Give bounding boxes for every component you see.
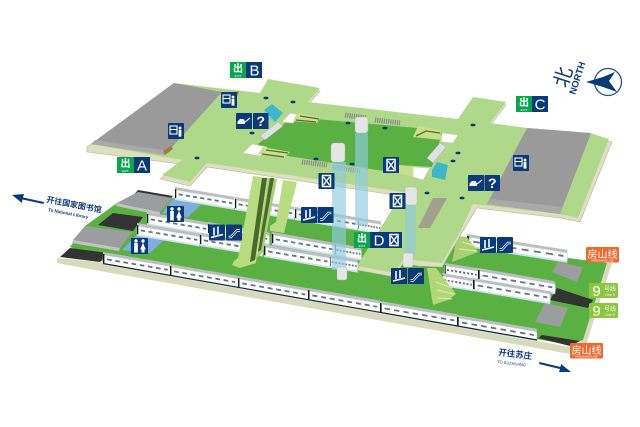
exit sign C: [516, 96, 548, 114]
icons: stairs and escalator south: [391, 268, 424, 284]
direction: to National Library: [12, 194, 102, 220]
icon: ticket office west B: [221, 92, 237, 108]
label: Line 9 south: [589, 303, 618, 320]
label: Line 9 south: 号线: [604, 305, 616, 313]
train: east lines: [442, 234, 567, 304]
icon: elevator three: [390, 193, 406, 209]
exit sign A: [117, 157, 150, 174]
icons: stairs and escalator east: [480, 237, 513, 253]
brown benches: [163, 91, 239, 155]
exit sign D with elevator: EXIT: [359, 244, 365, 248]
icons: service and information west: ?: [257, 113, 265, 129]
escalators to east platforms: [427, 236, 478, 305]
icons: service and information east: ?: [488, 175, 497, 191]
paid area: [258, 117, 442, 173]
small gate marks: [194, 97, 476, 199]
label: Fangshan line south: [570, 343, 603, 358]
passage bar: [418, 198, 447, 228]
direction: to National Library: To National Library: [48, 207, 89, 220]
exit sign B: EXIT: [235, 74, 241, 78]
icon: toilet north: [167, 206, 184, 222]
label: Line 9 north: 9: [592, 283, 601, 300]
direction: to Suzhuang: TO SUZHUANG: [497, 359, 526, 368]
concourse floor: [91, 79, 609, 273]
direction: to Suzhuang: 开往苏庄: [498, 347, 533, 361]
west ticket hall: [91, 83, 222, 155]
exit sign D with elevator: 出: [357, 232, 367, 245]
exit sign D with elevator: D: [374, 232, 385, 250]
exit sign A: 出: [120, 157, 130, 170]
label: Fangshan line north: FANGSHAN LINE: [591, 258, 614, 262]
exit sign C: 出: [519, 96, 529, 109]
label: Line 9 north: Line 9: [605, 293, 615, 297]
icon: toilet south: [131, 238, 148, 254]
east ticket hall: [487, 128, 591, 214]
train: front line: [103, 252, 537, 342]
track level green floor: [70, 192, 607, 345]
toilet areas: [122, 199, 201, 253]
label: Line 9 south: Line 9: [605, 313, 615, 317]
direction: to Suzhuang: [497, 347, 571, 372]
label: Fangshan line north: 房山线: [588, 248, 618, 261]
icon: elevator two: [318, 173, 334, 189]
exit sign D with elevator: [354, 232, 402, 250]
ticket machines: [260, 122, 446, 163]
elevator shafts: [332, 133, 416, 270]
platform blocks and tracks, west end: [60, 190, 173, 262]
exit sign B: [230, 62, 262, 80]
icon: ticket office east: [513, 155, 529, 171]
exit sign A: EXIT: [122, 169, 129, 173]
track level base: [57, 258, 612, 354]
label: Line 9 north: 号线: [604, 285, 616, 293]
icons: stairs and escalator centre: [301, 207, 334, 223]
elevator cars: [331, 117, 417, 280]
train: middle lines west: [137, 212, 361, 273]
exit sign A: A: [137, 158, 147, 174]
icon: elevator one: [383, 157, 399, 173]
ticket gates: [302, 115, 400, 171]
escalators to west platforms: [232, 176, 297, 268]
floor openings: [243, 113, 458, 180]
icon: ticket office west A: [168, 123, 184, 139]
label: Fangshan line south: 房山线: [572, 344, 602, 357]
north compass: 北: [549, 64, 578, 90]
concourse ledge: [87, 82, 612, 277]
label: Line 9 south: 9: [592, 303, 601, 320]
exit sign C: C: [535, 96, 546, 114]
exit sign B: 出: [233, 62, 243, 75]
direction: to National Library: 开往国家图书馆: [46, 194, 102, 215]
icons: service and information west: [236, 113, 268, 129]
exit sign B: B: [249, 62, 260, 80]
north compass: NORTH: [568, 60, 588, 96]
label: Fangshan line south: FANGSHAN LINE: [575, 354, 598, 358]
north compass: [549, 60, 622, 96]
label: Line 9 north: [589, 283, 618, 300]
label: Fangshan line north: [586, 247, 619, 262]
concourse escalator heads: [258, 113, 442, 177]
icons: stairs and escalator west: [209, 224, 242, 240]
exit sign C: EXIT: [521, 108, 527, 112]
icons: service and information east: [468, 175, 500, 191]
teal rooms: [264, 104, 448, 180]
train: back line west: [175, 187, 381, 234]
platform blocks and tracks, east end: [535, 262, 593, 346]
